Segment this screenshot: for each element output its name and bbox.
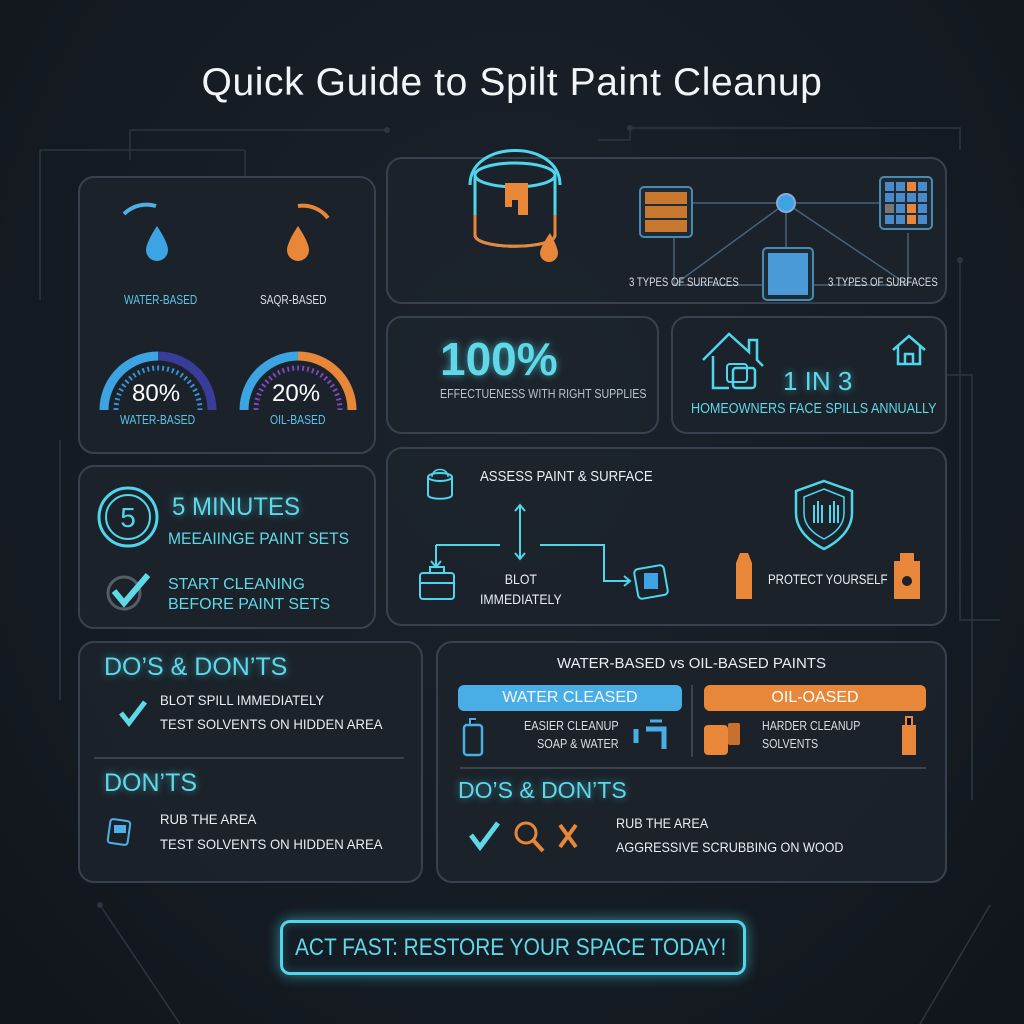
panel: do's and don'ts xyxy=(78,641,423,883)
heading: 5 minutes: 5 MINUTES xyxy=(172,493,300,521)
gauge: 20% xyxy=(240,352,356,410)
panel: 5 minutes xyxy=(78,465,376,629)
callout: CTA: ACT FAST: RESTORE YOUR SPACE TODAY! xyxy=(295,934,726,961)
arrows: flow xyxy=(419,504,669,600)
step: blot: BLOT xyxy=(505,571,537,587)
panel: do's and don'ts: BLOT SPILL IMMEDIATELY xyxy=(160,692,324,708)
badge: oil: OIL-OASED xyxy=(771,689,859,706)
panel: water vs oil: SOAP & WATER xyxy=(537,736,619,751)
callout: CTA xyxy=(280,920,746,975)
icon: timer xyxy=(98,486,158,548)
icons: oil side xyxy=(704,716,916,755)
panel: steps xyxy=(386,447,947,626)
diagram: surface types: 3 TYPES OF SURFACES xyxy=(629,275,739,289)
heading: do's: DO’S & DON’TS xyxy=(104,653,287,681)
step: blot: IMMEDIATELY xyxy=(480,591,562,607)
panel: water vs oil: RUB THE AREA xyxy=(616,815,708,831)
icon: water drop xyxy=(122,202,168,261)
badge: water: WATER CLEASED xyxy=(502,689,638,706)
icon: paint bucket xyxy=(468,149,562,262)
panel: do's and don'ts: TEST SOLVENTS ON HIDDEN AREA xyxy=(160,716,383,732)
badge: oil xyxy=(704,685,926,711)
step: assess: ASSESS PAINT & SURFACE xyxy=(480,468,653,485)
heading: don'ts: DON’TS xyxy=(104,769,197,797)
panel: water vs oil: HARDER CLEANUP xyxy=(762,718,860,733)
icon: check xyxy=(119,700,147,727)
panel: paint types gauges: 20% xyxy=(272,380,320,407)
icon: cloth xyxy=(106,818,132,846)
stat: 100%: 100% xyxy=(440,333,558,385)
panel: do's and don'ts: TEST SOLVENTS ON HIDDEN AREA xyxy=(160,836,383,852)
panel: 5 minutes: BEFORE PAINT SETS xyxy=(168,596,330,613)
label: water-based: WATER-BASED xyxy=(124,292,197,307)
step: blot xyxy=(480,571,562,607)
panel: paint types gauges: 80% xyxy=(132,380,180,407)
diagram: surface types xyxy=(629,176,938,301)
panel: water vs oil xyxy=(436,641,947,883)
icon: check xyxy=(106,573,150,610)
stat: 1 in 3: 1 IN 3 xyxy=(783,366,852,396)
icon: oil drop xyxy=(287,204,330,261)
heading: comparison: WATER-BASED vs OIL-BASED PAINTS xyxy=(557,655,826,672)
panel: paint types gauges xyxy=(78,176,376,454)
diagram: surface types: 3 TYPES OF SURFACES xyxy=(828,275,938,289)
icons: water side xyxy=(462,718,666,756)
icon: shield gloves xyxy=(794,480,854,550)
icon: small house xyxy=(892,334,926,366)
panel: water vs oil: EASIER CLEANUP xyxy=(524,718,619,733)
label: oil-based: SAQR-BASED xyxy=(260,292,326,307)
icons: check, search, cross xyxy=(469,822,578,852)
panel: water vs oil: AGGRESSIVE SCRUBBING ON WOOD xyxy=(616,839,844,855)
icon: timer: 5 xyxy=(120,502,136,533)
panel: paint types gauges: WATER-BASED xyxy=(120,412,195,427)
icon: bottles xyxy=(736,553,920,599)
heading: do's & don'ts: DO’S & DON’TS xyxy=(458,777,627,803)
badge: water xyxy=(458,685,682,711)
panel: paint types gauges: OIL-BASED xyxy=(270,412,325,427)
panel: do's and don'ts: RUB THE AREA xyxy=(160,811,256,827)
panel: 100% effectiveness xyxy=(386,316,659,434)
panel: water vs oil: SOLVENTS xyxy=(762,736,818,751)
panel: 5 minutes: START CLEANING xyxy=(168,576,305,593)
icon: small bucket xyxy=(427,468,453,500)
step: protect: PROTECT YOURSELF xyxy=(768,571,888,587)
gauge: 80% xyxy=(100,352,216,410)
icon: house xyxy=(702,332,764,390)
panel: 100% effectiveness: EFFECTUENESS WITH RIGHT SUPPLIES xyxy=(440,386,647,401)
panel: 1 in 3 homeowners xyxy=(671,316,947,434)
panel: 1 in 3 homeowners: HOMEOWNERS FACE SPILLS ANNUALLY xyxy=(691,400,937,417)
panel: 5 minutes: MEEAIINGE PAINT SETS xyxy=(168,529,349,548)
title: Quick Guide to Spilt Paint Cleanup xyxy=(202,61,822,104)
panel: surfaces xyxy=(386,157,947,304)
